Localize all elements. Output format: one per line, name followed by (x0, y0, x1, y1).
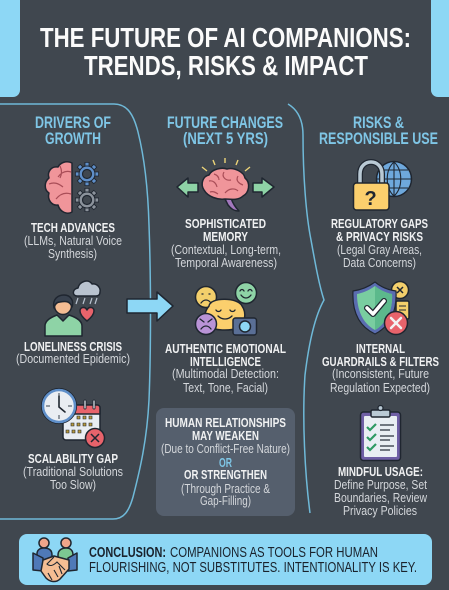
text: scalability gap: Too Slow) (50, 478, 96, 492)
icon: lonely person with rain cloud and heart (45, 281, 100, 336)
text: loneliness crisis: (Documented Epidemic) (16, 352, 130, 366)
text: regulatory gaps and privacy risks (331, 217, 428, 270)
text: internal guardrails and filters: (Inconsistent, Future (332, 367, 429, 381)
icon: shield with check and x (353, 282, 409, 334)
callout: human relationships: HUMAN RELATIONSHIPS (165, 416, 286, 430)
divider: right chevron outline (288, 104, 324, 513)
decorative tab: top left (0, 0, 20, 97)
callout: human relationships: OR (219, 456, 232, 470)
text: internal guardrails and filters: INTERNAL (356, 342, 405, 356)
text: mindful usage (334, 465, 428, 518)
text: sophisticated memory: MEMORY (203, 230, 249, 244)
title (40, 22, 411, 81)
text: mindful usage: Define Purpose, Set (334, 478, 427, 492)
callout: human relationships: MAY WEAKEN (192, 429, 259, 443)
callout: human relationships: OR STRENGTHEN (184, 468, 267, 482)
text: internal guardrails and filters: Regulation Expected) (330, 381, 430, 395)
text: loneliness crisis (16, 340, 130, 366)
icon: handshake with two people (33, 538, 77, 582)
arrow: drivers to future changes (127, 292, 173, 321)
panel: conclusion (19, 534, 432, 585)
text: tech advances: Synthesis) (48, 247, 97, 261)
panel: risks and responsible use (319, 114, 439, 518)
icon: emotion faces and camera (196, 282, 256, 335)
text: regulatory gaps and privacy risks: Data Concerns) (343, 256, 416, 270)
text: scalability gap (23, 452, 123, 492)
text: authentic emotional intelligence (165, 342, 286, 395)
panel: drivers of growth (16, 114, 130, 492)
text: regulatory gaps and privacy risks: & PRIVACY RISKS (336, 230, 423, 244)
text: mindful usage: MINDFUL USAGE: (338, 465, 423, 479)
text: conclusion: COMPANIONS AS TOOLS FOR HUMAN (170, 545, 378, 561)
text: authentic emotional intelligence: Text, Tone, Facial) (183, 381, 268, 395)
icon: brain and gears (45, 162, 99, 213)
heading: drivers of growth (35, 114, 111, 148)
callout: human relationships: Gap-Filling) (200, 494, 251, 508)
text: internal guardrails and filters (322, 342, 439, 395)
text: conclusion: CONCLUSION: (89, 545, 166, 561)
text: tech advances: (LLMs, Natural Voice (24, 234, 122, 248)
text: sophisticated memory: SOPHISTICATED (185, 217, 266, 231)
text: mindful usage: Privacy Policies (343, 504, 417, 518)
callout: human relationships (156, 408, 295, 516)
text: tech advances: TECH ADVANCES (31, 221, 115, 235)
heading: drivers of growth: GROWTH (45, 130, 101, 148)
text: loneliness crisis: LONELINESS CRISIS (24, 340, 122, 354)
icon: clock and calendar with x (42, 388, 104, 448)
callout: human relationships: (Through Practice & (181, 482, 271, 496)
text: conclusion (89, 545, 417, 576)
heading: future changes (167, 114, 283, 148)
text: tech advances (24, 221, 122, 261)
text: sophisticated memory: (Contextual, Long-term, (171, 243, 281, 257)
text: scalability gap: (Traditional Solutions (23, 465, 123, 479)
text: mindful usage: Boundaries, Review (334, 491, 428, 505)
text: sophisticated memory (171, 217, 281, 270)
icon: padlock and globe: ? (364, 188, 377, 210)
divider: left panel outline (0, 104, 150, 519)
icon: clipboard checklist (360, 406, 400, 460)
heading: risks and responsible use: RISKS & (353, 114, 404, 132)
icon: padlock and globe (354, 162, 412, 210)
heading: future changes: FUTURE CHANGES (167, 114, 283, 132)
text: sophisticated memory: Temporal Awareness) (175, 256, 277, 270)
heading: future changes: (NEXT 5 YRS) (183, 130, 268, 148)
text: scalability gap: SCALABILITY GAP (28, 452, 118, 466)
text: regulatory gaps and privacy risks: (Legal Gray Areas, (337, 243, 422, 257)
text: authentic emotional intelligence: INTELLIGENCE (190, 355, 261, 369)
panel: future changes (156, 114, 295, 516)
text: authentic emotional intelligence: (Multimodal Detection: (172, 367, 279, 381)
heading: risks and responsible use (319, 114, 438, 148)
title: TRENDS, RISKS & IMPACT (84, 50, 368, 81)
text: authentic emotional intelligence: AUTHENTIC EMOTIONAL (165, 342, 286, 356)
callout: human relationships: (Due to Conflict-Free Nature) (161, 442, 290, 456)
icon: brain with arrows and rays (177, 158, 274, 211)
decorative tab: top right (431, 0, 449, 97)
heading: drivers of growth: DRIVERS OF (35, 114, 111, 132)
